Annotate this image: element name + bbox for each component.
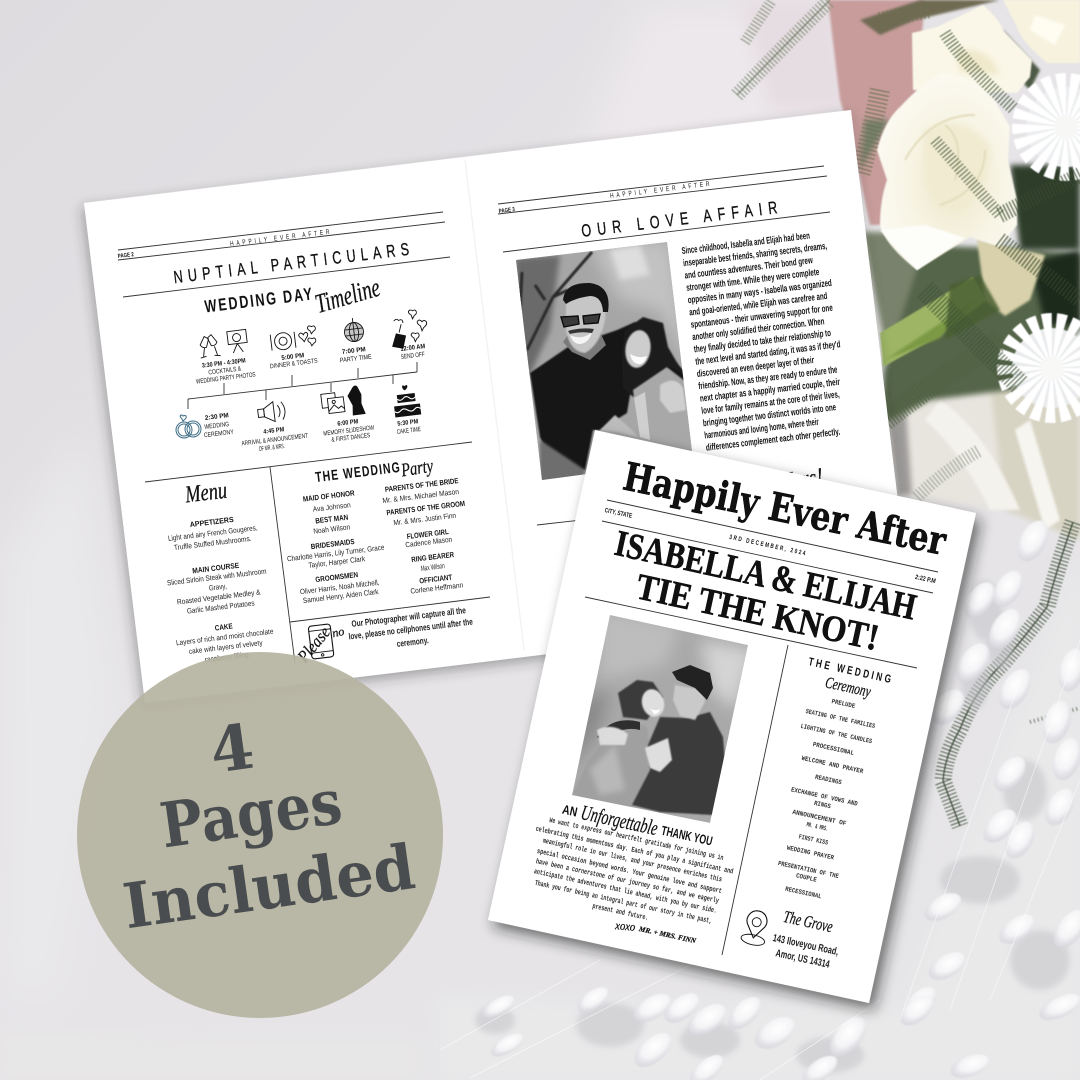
wedding party column <box>287 456 465 605</box>
timeline entries: 4:45 PM <box>263 426 285 436</box>
front paper <box>488 430 976 1003</box>
timeline entries: 3:30 PM - 4:30PM <box>202 357 246 370</box>
dateline rules and text <box>585 500 938 668</box>
icon: wedding rings <box>176 415 201 438</box>
ceremony column <box>777 656 892 900</box>
thank you paragraph: have been a cornerstone of our journey so far, and we eagerly <box>535 858 720 906</box>
heading: an unforgettable thank you: Unforgettable <box>579 800 660 840</box>
menu column: Garlic Mashed Potatoes <box>186 598 255 616</box>
menu column: Light and airy French Gougeres, <box>167 523 258 543</box>
page 3 masthead: PAGE 3 <box>499 207 516 215</box>
ceremony column: FIRST KISS <box>798 833 829 847</box>
icon: plate and hearts <box>270 325 318 351</box>
story paragraph: and countless adventures. Their bond grew <box>684 255 814 282</box>
wedding party column: OFFICIANT <box>419 573 453 585</box>
wedding party column: PARENTS OF THE BRIDE <box>384 476 459 494</box>
dateline rules and text: 3RD DECEMBER, 2024 <box>729 534 807 558</box>
timeline entries: CEREMONY <box>204 429 235 439</box>
page 2 masthead <box>118 212 450 297</box>
story paragraph: differences complement each other perfectly. <box>705 427 841 454</box>
ceremony column: WEDDING PRAYER <box>786 845 835 862</box>
thank you paragraph: special occasion beyond words. Your genuine love and support <box>536 848 722 896</box>
story paragraph: harmonious and loving home, where their <box>704 417 819 441</box>
timeline entries: MEMORY SLIDESHOW <box>323 424 375 438</box>
timeline entries: DINNER & TOASTS <box>270 358 319 370</box>
story paragraph: next chapter as a happily married couple, their <box>699 377 841 405</box>
timeline entries: SEND OFF <box>400 351 425 361</box>
wedding party column: Oliver Harris, Noah Mitchell, <box>299 578 380 596</box>
story paragraph: inseparable best friends, sharing secrets, dreams, <box>683 241 828 269</box>
badge: 4 pages included: Pages <box>156 765 346 863</box>
timeline entries: 7:00 PM <box>341 346 366 356</box>
photo: couple laughing <box>516 242 692 480</box>
venue: Amor, US 14314 <box>774 947 831 971</box>
story paragraph: spontaneous - their unwavering support for one <box>690 303 833 331</box>
page 2 masthead: PAGE 2 <box>118 252 135 260</box>
ceremony column: COUPLE <box>795 872 817 884</box>
icon: champagne and hearts <box>389 308 429 349</box>
sign-off: MR. + MRS. FINN <box>637 925 698 945</box>
story paragraph: stronger with time. While they were complete <box>686 267 820 294</box>
heading: wedding day timeline: WEDDING DAY <box>204 285 313 317</box>
man's sweater <box>530 322 690 470</box>
story paragraph: opposites in many ways - Isabella was organized <box>687 278 832 306</box>
heading: an unforgettable thank you: AN <box>561 802 579 820</box>
wedding party column: Noah Wilson <box>313 522 351 536</box>
timeline entries: OF MR. & MRS. <box>258 443 285 453</box>
timeline entries: COCKTAILS & <box>208 365 242 376</box>
wedding party column: Party <box>399 456 435 482</box>
his arm and hand on her <box>597 720 640 738</box>
timeline entries: & FIRST DANCES <box>331 432 371 444</box>
ceremony column: WELCOME AND PRAYER <box>801 755 864 775</box>
heading: our love affair: OUR LOVE AFFAIR <box>580 198 778 241</box>
timeline entries: 5:30 PM <box>397 418 419 428</box>
wedding party column: Charlotte Harris, Lily Turner, Grace <box>287 543 385 563</box>
hands <box>645 738 672 772</box>
pearl beads <box>440 515 1080 1080</box>
flowers and greenery <box>737 0 1080 826</box>
icon: photos <box>321 392 345 414</box>
menu column: Layers of rich and moist chocolate <box>176 627 274 647</box>
wedding party column: Mr. & Mrs. Michael Mason <box>382 487 459 505</box>
front page card <box>488 430 976 1003</box>
masthead: happily ever after: Happily Ever After <box>619 454 950 565</box>
menu column: MAIN COURSE <box>192 561 240 575</box>
menu column: Menu <box>183 478 229 509</box>
timeline entries: 2:30 PM <box>204 412 229 422</box>
icon: speaker <box>257 400 286 423</box>
wedding party column: GROOMSMEN <box>315 570 359 584</box>
spread paper <box>84 110 911 703</box>
story paragraph: Since childhood, Isabella and Elijah had been <box>681 231 811 257</box>
section dividers <box>145 442 490 663</box>
photographer note <box>348 605 473 649</box>
thank you paragraph: celebrating this momentous day. Each of you play a significant and <box>535 826 734 876</box>
rose top <box>912 5 1032 93</box>
menu column: APPETIZERS <box>189 515 234 529</box>
heading: wedding day timeline: Timeline <box>312 272 383 319</box>
signature partly hidden: & Hers! <box>757 462 824 499</box>
grey-green fern mass <box>862 232 975 345</box>
timeline entries: 6:00 PM <box>337 418 359 428</box>
icon: dancing couple <box>346 385 366 416</box>
story paragraph: discovered an even deeper layer of their <box>696 355 815 380</box>
timeline entries: PARTY TIME <box>340 354 373 364</box>
heading: an unforgettable thank you: THANK YOU <box>660 823 714 848</box>
ceremony column: PRELUDE <box>831 698 856 710</box>
wedding party column: Taylor, Harper Clark <box>308 554 366 570</box>
ceremony column: LIGHTING OF THE CANDLES <box>800 723 873 745</box>
ceremony column: ANNOUNCEMENT OF <box>792 809 847 827</box>
timeline entries <box>196 343 426 453</box>
tan leaf <box>977 240 1045 316</box>
wedding party column: BRIDESMAIDS <box>310 537 355 551</box>
wedding party column: FLOWER GIRL <box>406 527 449 541</box>
ceremony column: MR. & MRS. <box>806 821 829 833</box>
his face and hair <box>673 685 705 720</box>
wedding party column: Cadence Mason <box>405 535 453 549</box>
venue: 143 Iloveyou Road, <box>772 932 840 958</box>
heading: nuptial particulars: NUPTIAL PARTICULARS <box>173 240 410 288</box>
timeline entries: CAKE TIME <box>396 426 422 436</box>
white chrysanthemums <box>1012 87 1080 408</box>
story paragraph: and goal-oriented, while Elijah was carefree and <box>689 291 828 318</box>
fern fronds <box>737 0 1080 826</box>
story paragraph: another only solidified their connection. When <box>692 316 825 343</box>
ceremony column: Ceremony <box>824 674 873 701</box>
wedding party column: Max Wilson <box>420 561 445 573</box>
icon: please no phones: no <box>331 624 345 640</box>
thank you paragraph: Thank you for being an integral part of our story in the past, <box>534 880 712 926</box>
story paragraph: the next level and started dating, it was as if they'd <box>695 339 841 368</box>
ceremony column: RINGS <box>813 800 831 810</box>
thank you paragraph: present and future. <box>592 903 649 923</box>
thank you paragraph <box>533 817 734 926</box>
icon: please no phones: Please <box>293 623 334 667</box>
page 3 masthead <box>498 166 830 252</box>
wedding party column: BEST MAN <box>315 513 349 525</box>
icon: cake <box>392 384 421 417</box>
timeline entries: WEDDING PARTY PHOTOS <box>196 371 256 386</box>
wedding party column: RING BEARER <box>411 550 455 564</box>
timeline entries: WEDDING <box>204 421 230 431</box>
ceremony column: READINGS <box>814 774 842 786</box>
badge: 4 pages included: 4 <box>206 710 258 788</box>
story paragraph: they finally decided to take their relationship to <box>693 328 832 355</box>
ceremony column: PROCESSIONAL <box>812 741 855 757</box>
page 3 lower rule <box>537 519 590 525</box>
wedding party column: MAID OF HONOR <box>302 488 356 504</box>
icon: cocktails and camera <box>198 329 248 358</box>
sign-off <box>614 918 698 945</box>
photographer note: ceremony. <box>396 635 429 649</box>
menu column: Gravy, <box>208 581 227 593</box>
rose main <box>877 73 1017 270</box>
wedding party column: Samuel Henry, Aiden Clark <box>302 587 379 605</box>
vertical column rule <box>722 645 788 955</box>
menu column: Roasted Vegetable Medley & <box>176 588 261 607</box>
dateline rules and text: CITY, STATE <box>604 507 633 520</box>
man's collar, face, hair, glasses <box>563 332 606 360</box>
wedding party column: Ava Johnson <box>312 500 351 514</box>
headline: TIE THE KNOT! <box>632 566 882 659</box>
badge: 4 pages included: Included <box>119 830 419 943</box>
story paragraph: love for family remains at the core of their lives, <box>701 389 840 417</box>
badge: 4 pages included <box>77 652 443 1018</box>
rose top right <box>1003 0 1080 63</box>
heading: wedding day timeline <box>204 272 383 319</box>
thank you paragraph: meaningful role in our lives, and your presence enriches this <box>542 838 722 884</box>
venue <box>772 907 840 971</box>
story paragraph: friendship. Now, as they are ready to endure the <box>698 365 838 392</box>
menu column: cake with layers of velvety <box>188 638 263 656</box>
icon: disco ball <box>343 317 365 343</box>
ceremony column: THE WEDDING <box>807 656 892 686</box>
menu column: CAKE <box>214 621 233 633</box>
menu column: Truffle Stuffed Mushrooms. <box>173 534 252 552</box>
ceremony column: RECESSIONAL <box>784 886 822 900</box>
timeline entries: 5:00 PM <box>281 352 305 362</box>
timeline entries: 12:00 AM <box>400 343 426 353</box>
wedding party column: THE WEDDING <box>314 459 401 486</box>
menu column: raspberry filling <box>204 650 249 664</box>
ceremony column: EXCHANGE OF VOWS AND <box>790 786 858 808</box>
wedding party column: Corlene Heffmann <box>410 580 464 596</box>
thank you paragraph: anticipate the adventures that lie ahead, with you by our side. <box>533 868 717 916</box>
dateline rules and text: 2:22 P.M <box>914 574 936 585</box>
photo: couple embracing <box>570 610 755 823</box>
page 2 masthead: HAPPILY EVER AFTER <box>230 229 330 248</box>
photographer note: love, please no cellphones until after the <box>348 617 473 641</box>
wedding party column: Mr. & Mrs. Justin Finn <box>393 511 457 527</box>
open spread: pages 2 and 3 <box>84 110 911 703</box>
ceremony column: SEATING OF THE FAMILIES <box>805 708 876 730</box>
menu column <box>167 478 274 664</box>
timeline connector lines <box>188 362 417 409</box>
ceremony column: PRESENTATION OF THE <box>777 860 839 880</box>
her coat <box>572 718 649 808</box>
woman's hair, face, coat <box>622 317 683 397</box>
her hair and face <box>618 680 663 720</box>
photographer note: Our Photographer will capture all the <box>351 605 466 629</box>
icon: location pin <box>740 909 771 947</box>
story paragraph: bringing together two distinct worlds into one <box>702 402 837 429</box>
lower white petals and beige cloth <box>885 380 1000 510</box>
thank you paragraph: We want to express our heartfelt gratitude for joining us in <box>548 817 724 863</box>
wedding party column: PARENTS OF THE GROOM <box>386 499 465 517</box>
story paragraph <box>681 231 841 454</box>
menu column: Sliced Sirloin Steak with Mushroom <box>167 567 267 587</box>
pink fabric <box>828 0 925 225</box>
timeline entries: ARRIVAL & ANNOUNCEMENT <box>241 433 309 448</box>
sign-off: xoxo <box>614 918 636 934</box>
headline: ISABELLA & ELIJAH <box>611 523 920 629</box>
page 3 masthead: HAPPILY EVER AFTER <box>610 181 710 200</box>
venue: The Grove <box>782 907 835 936</box>
stem <box>880 277 987 367</box>
his sweater <box>632 712 725 815</box>
